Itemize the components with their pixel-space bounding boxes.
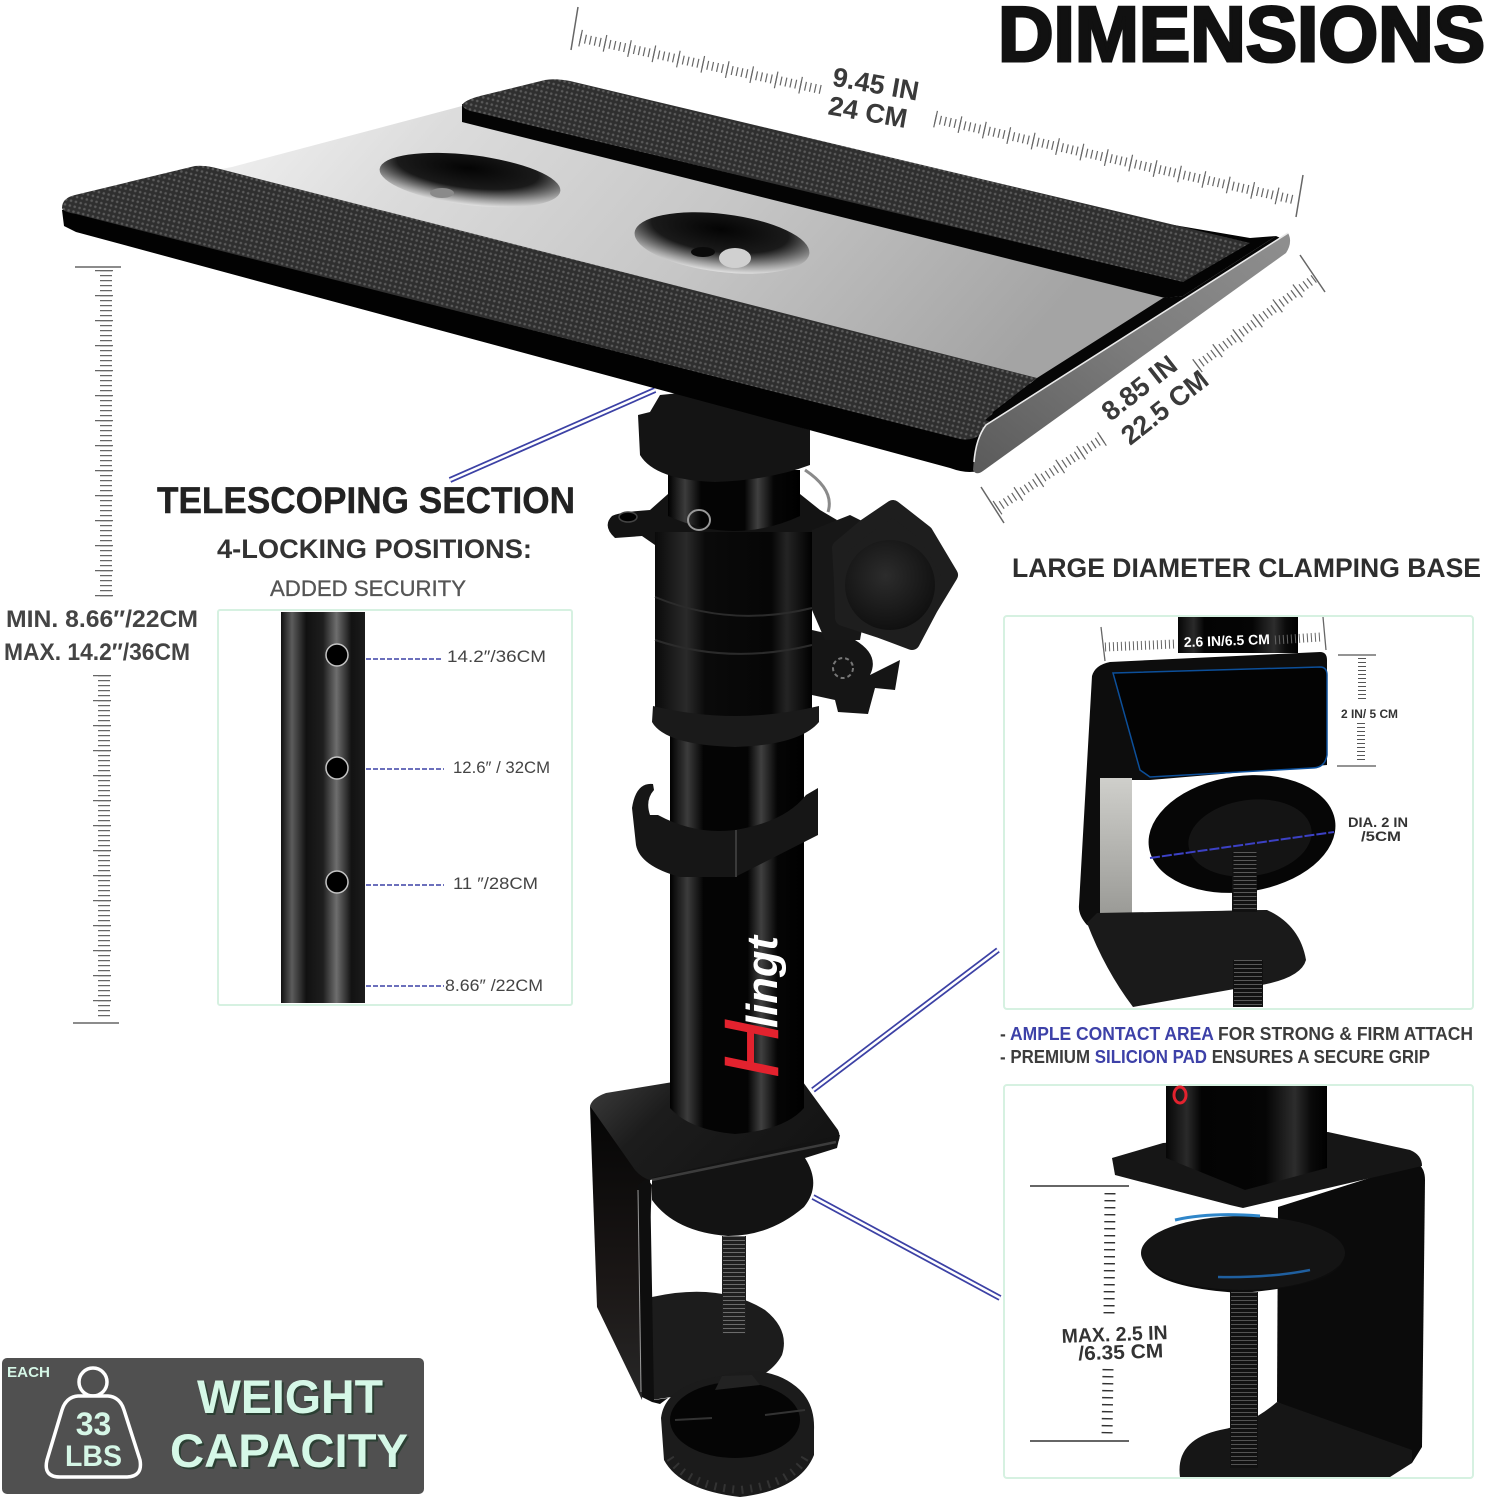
weight capacity text: CAPACITY	[172, 1426, 410, 1479]
icon: weight: 33	[76, 1406, 111, 1442]
disc diameter label: /5CM	[1361, 828, 1401, 844]
ruler: plate width	[571, 7, 1303, 217]
lower ring	[652, 706, 819, 747]
telescoping stand	[608, 393, 950, 1138]
capacity ruler	[1030, 1186, 1129, 1441]
panel: clamp capacity detail	[1004, 1085, 1473, 1478]
lower jaw	[652, 1292, 784, 1400]
lever	[812, 630, 900, 714]
clamp side wall	[590, 1106, 652, 1400]
weight capacity text	[170, 1370, 410, 1479]
label: plate width	[825, 62, 921, 135]
label: plate width: 24 CM	[826, 91, 910, 134]
position labels: 8.66″ /22CM	[445, 976, 543, 995]
pressure pad	[652, 1135, 840, 1236]
disc diameter label: DIA. 2 IN	[1348, 814, 1408, 830]
pad width label: 2.6 IN/6.5 CM	[1184, 631, 1270, 650]
heading: clamping base: LARGE DIAMETER CLAMPING BASE	[1012, 553, 1481, 583]
rail highlight	[638, 1190, 641, 1392]
label: stand height: MIN. 8.66″/22CM	[6, 606, 198, 633]
weight capacity text: WEIGHT	[197, 1370, 383, 1423]
brand logo: lingt	[738, 934, 787, 1028]
right lip	[973, 233, 1290, 473]
lip highlight	[974, 233, 1288, 462]
panel: locking positions	[218, 610, 572, 1005]
logo fragment	[1174, 1087, 1186, 1103]
capacity label: MAX. 2.5 IN	[1061, 1322, 1168, 1348]
weight capacity text: WEIGHT	[199, 1372, 385, 1425]
speaker plate	[62, 79, 1290, 473]
label: stand height: MAX. 14.2″/36CM	[4, 639, 190, 666]
label: stand height	[4, 606, 198, 666]
pressure disc	[1141, 1215, 1345, 1293]
pad depth ruler	[1337, 655, 1376, 766]
star knob	[812, 508, 950, 642]
icon: weight: LBS	[65, 1440, 122, 1473]
position labels: 14.2″/36CM	[447, 647, 546, 666]
top collar	[638, 393, 810, 482]
silicone pad	[1113, 667, 1327, 777]
pad depth label: 2 IN/ 5 CM	[1341, 709, 1398, 721]
pressure disc	[1141, 763, 1343, 905]
threaded rod	[1230, 1292, 1258, 1468]
badge: weight capacity	[2, 1358, 424, 1494]
feature notes: - AMPLE CONTACT AREA FOR STRONG & FIRM ATTACH	[1000, 1024, 1473, 1044]
pad width ruler	[1101, 617, 1326, 661]
label: plate depth	[1096, 340, 1214, 451]
icon: weight	[46, 1368, 140, 1477]
column	[1178, 617, 1298, 653]
position labels: 11 ″/28CM	[453, 874, 538, 893]
ruler: plate depth	[981, 255, 1325, 523]
front knurled pad	[62, 166, 1037, 439]
clamp bracket	[1079, 652, 1327, 930]
flange	[608, 494, 837, 545]
brand logo	[710, 934, 795, 1078]
threaded rod	[1232, 852, 1263, 1007]
main body	[655, 532, 812, 725]
tube with holes	[281, 612, 365, 1003]
tube clip	[632, 784, 818, 877]
column	[1166, 1086, 1327, 1190]
feature notes: - PREMIUM SILICION PAD ENSURES A SECURE GRIP	[1000, 1047, 1430, 1067]
label: plate depth: 8.85 IN	[1096, 349, 1183, 427]
heading: telescoping section: TELESCOPING SECTION	[157, 480, 575, 521]
upper tube	[668, 470, 800, 542]
plate underside	[62, 166, 1033, 472]
brand logo: H	[710, 1020, 795, 1078]
flange ear hole	[619, 512, 637, 522]
upper plate	[590, 1082, 840, 1180]
speaker mounting cone left	[377, 144, 563, 216]
desk clamp	[590, 1076, 840, 1497]
hand knob	[661, 1371, 814, 1497]
subheading: added security: ADDED SECURITY	[270, 576, 466, 601]
callout line: telescoping	[450, 390, 655, 480]
weight capacity text: CAPACITY	[170, 1424, 408, 1477]
each label: EACH	[7, 1364, 50, 1381]
threaded rod	[722, 1236, 746, 1334]
panel: clamp pad detail	[1004, 616, 1473, 1009]
plate edge highlight	[652, 1142, 836, 1180]
front rail	[638, 1176, 668, 1404]
rear knurled pad	[462, 79, 1276, 298]
callout lines: clamp	[813, 950, 1000, 1298]
right wall	[1277, 1163, 1425, 1463]
heading: locking positions: 4-LOCKING POSITIONS:	[217, 534, 532, 564]
lower tube	[670, 728, 804, 1138]
ruler: stand height	[73, 267, 121, 1023]
silver plate surface	[205, 106, 1175, 382]
speaker mounting cone right	[631, 203, 813, 283]
label: plate depth: 22.5 CM	[1115, 364, 1214, 451]
capacity label: /6.35 CM	[1078, 1340, 1164, 1365]
lower jaw	[1087, 910, 1306, 1007]
feature notes	[1000, 1024, 1473, 1067]
black lip channel	[985, 236, 1285, 425]
position markers	[366, 659, 444, 986]
position labels	[445, 647, 550, 995]
steel inner face	[1100, 778, 1132, 913]
label: plate width: 9.45 IN	[830, 62, 921, 107]
pin ring	[805, 470, 829, 512]
top plate	[1112, 1132, 1422, 1208]
base plate	[1180, 1402, 1412, 1477]
tube base	[670, 1076, 804, 1134]
position labels: 12.6″ / 32CM	[453, 758, 550, 777]
spring pin	[688, 510, 710, 530]
disc diameter label	[1348, 814, 1408, 844]
capacity label	[1061, 1322, 1169, 1366]
